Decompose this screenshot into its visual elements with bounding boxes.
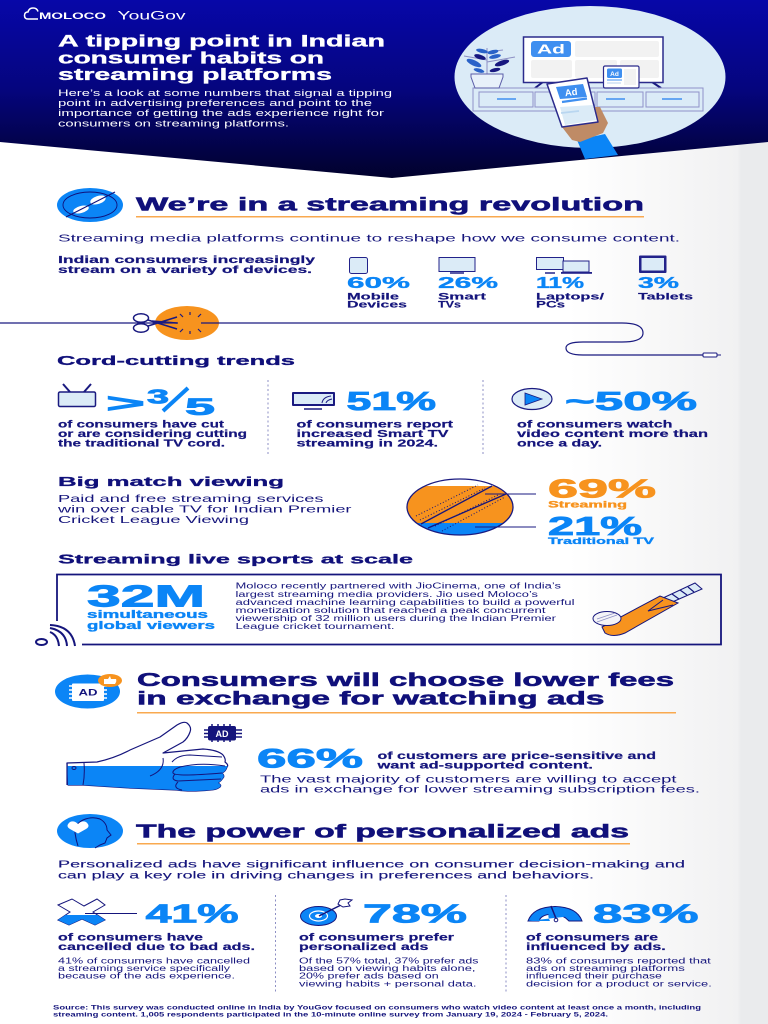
stat: three fifths cutting the cord: or are considering cutting: [58, 429, 247, 440]
intro text: importance of getting the ads experience right for: [58, 108, 385, 119]
partnership text: largest streaming media providers. Jio used Moloco’s: [236, 590, 538, 599]
icon: ad chip: [204, 724, 242, 742]
stat: 78% prefer personalized: Of the 57% total, 37% prefer ads: [299, 956, 479, 965]
stat: 83% influenced: influenced by ads.: [526, 942, 666, 953]
illustration: thumbs up: [67, 722, 242, 791]
explanation text: The vast majority of customers are willing to accept: [260, 774, 677, 785]
stat: 78% prefer personalized: personalized ads: [299, 942, 429, 953]
tv: Ad: [537, 42, 565, 56]
stat: three fifths cutting the cord: 3: [147, 386, 169, 408]
stat: 83% influenced: [526, 898, 712, 988]
hand and phone: [547, 78, 618, 159]
title: [58, 33, 385, 84]
intro text: [58, 858, 685, 882]
devices lead text: Indian consumers increasingly: [58, 255, 316, 266]
source note: streaming content. 1,005 respondents participated in the 10-minute online survey from January 19, 2024 - February 5, 2024.: [53, 1011, 608, 1018]
stat: mobile devices: Devices: [347, 300, 407, 310]
tablet: Ad: [610, 71, 619, 78]
tv: [524, 37, 663, 88]
stat: 41% cancelled: [58, 898, 255, 981]
stat: 66%: 66%: [257, 744, 363, 774]
stat: laptops: PCs: [536, 300, 565, 310]
intro text: point in advertising preferences and point to the: [58, 98, 372, 109]
title: streaming platforms: [58, 66, 332, 84]
icon: play: [512, 388, 552, 410]
stat: three fifths cutting the cord: 5: [185, 394, 215, 421]
icon: cricket bat and ball: [593, 583, 702, 636]
logos: [24, 8, 186, 22]
stat: 83% influenced: 83%: [593, 898, 698, 928]
stat: 41% cancelled: of consumers have: [58, 933, 204, 944]
stat: mobile devices: Mobile: [347, 291, 399, 301]
partnership text: Moloco recently partnered with JioCinema, one of India’s: [236, 582, 561, 591]
section: lower fees: [55, 669, 700, 795]
intro text: Here’s a look at some numbers that signal a tipping: [58, 88, 392, 99]
description: Paid and free streaming services: [58, 494, 324, 505]
stat: 41% cancelled: 41% of consumers have cancelled: [58, 956, 250, 965]
description: [56, 494, 353, 526]
devices lead text: [58, 255, 316, 276]
section: personalized ads: [57, 814, 712, 993]
stat: laptops: 11%: [536, 275, 584, 292]
icon: x mark: [58, 899, 137, 925]
connector plug: [703, 353, 717, 357]
stat: laptops: [536, 258, 605, 310]
stat: smart tvs: [438, 258, 498, 310]
stat: 51% smart tv: of consumers report: [296, 419, 454, 430]
stat: 78% prefer personalized: [299, 898, 479, 988]
partnership text: monetization solution that reached a peak concurrent: [236, 606, 547, 615]
stat: 78% prefer personalized: 20% prefer ads based on: [299, 972, 439, 981]
icon: unplugged cable: [57, 188, 123, 222]
stat: tablets: Tablets: [638, 291, 693, 301]
stat: tablets: 3%: [638, 275, 679, 292]
stat: tablets: [638, 256, 693, 301]
intro text: Personalized ads have significant influence on consumer decision-making and: [58, 858, 685, 870]
icon: target: [300, 899, 352, 926]
scissors: [134, 312, 201, 334]
stat: 83% influenced: decision for a product or service.: [526, 979, 712, 988]
stat: 78% prefer personalized: based on viewing habits alone,: [299, 964, 476, 973]
stat: smart tvs: 26%: [438, 275, 498, 292]
stat: 51% smart tv: increased Smart TV: [296, 429, 449, 440]
stat: mobile devices: 60%: [347, 275, 410, 292]
stat: streaming 69%: 69%: [548, 473, 656, 503]
stat: 78% prefer personalized: of consumers prefer: [299, 933, 454, 944]
icon: ad chip: AD: [216, 729, 229, 739]
title: consumer habits on: [58, 50, 324, 68]
stat: 78% prefer personalized: viewing habits + personal data.: [299, 979, 476, 988]
plant: [464, 48, 515, 88]
stat: 66%: [257, 744, 656, 774]
stat: 41% cancelled: 41%: [146, 898, 239, 928]
section: streaming live sports: [36, 551, 721, 646]
intro text: can play a key role in driving changes in preferences and behaviors.: [58, 870, 594, 882]
heading: cord-cutting trends: Cord-cutting trends: [57, 353, 295, 368]
source note: [53, 1005, 701, 1018]
icon: broadcast signal: [36, 625, 75, 646]
heading: Consumers will choose lower fees: [137, 669, 674, 690]
stat: three fifths cutting the cord: of consumers have cut: [58, 419, 225, 430]
stat: traditional tv 21%: 21%: [548, 511, 642, 541]
heading: We’re in a streaming revolution: [136, 194, 644, 215]
stat: 51% smart tv: [292, 386, 454, 449]
stat: traditional tv 21%: [548, 511, 655, 547]
stat: 41% cancelled: because of the ads experience.: [58, 972, 235, 981]
devices lead text: stream on a variety of devices.: [58, 265, 312, 276]
hand and phone: Ad: [564, 87, 578, 99]
intro text: [58, 88, 392, 130]
partnership text: [236, 582, 575, 631]
tablet: [604, 66, 639, 88]
icon: smart tv: [292, 392, 335, 409]
description: Cricket League Viewing: [58, 515, 250, 526]
stat: 51% smart tv: 51%: [346, 386, 436, 416]
icon: ad chip with thumbs up: AD: [78, 688, 98, 698]
stat: streaming 69%: Streaming: [548, 499, 627, 510]
stat: 32M viewers: simultaneous: [87, 609, 208, 621]
cut cord with scissors: [0, 306, 721, 357]
intro sentence: Streaming media platforms continue to reshape how we consume content.: [58, 234, 680, 245]
stat: laptops: Laptops/: [536, 291, 605, 301]
stat: mobile devices: [347, 258, 410, 310]
section: streaming live sports: Streaming live sports at scale: [58, 551, 413, 566]
source note: Source: This survey was conducted online in India by YouGov focused on consumers who watch video content at least once a month, including: [53, 1005, 701, 1012]
icon: tv: [58, 384, 96, 406]
logos: MOLOCO: [39, 11, 106, 22]
header banner: [0, 0, 768, 178]
stat: 41% cancelled: cancelled due to bad ads.: [58, 942, 255, 953]
section: streaming revolution: [57, 188, 693, 310]
stat: traditional tv 21%: Traditional TV: [548, 536, 655, 547]
explanation text: [260, 774, 700, 795]
panel frame: [57, 574, 721, 644]
stat: 83% influenced: ads on streaming platforms: [526, 964, 685, 973]
intro text: consumers on streaming platforms.: [58, 119, 289, 130]
stat: 83% influenced: of consumers are: [526, 933, 659, 944]
illustration: devices showing ads: [454, 6, 726, 159]
partnership text: League cricket tournament.: [236, 622, 394, 631]
heading: in exchange for watching ads: [137, 687, 604, 708]
stat: 78% prefer personalized: 78%: [363, 898, 467, 928]
stat: 32M viewers: 32M: [87, 579, 205, 614]
explanation text: ads in exchange for lower streaming subscription fees.: [260, 784, 700, 795]
stat: about 50% daily video: [512, 386, 708, 449]
stat: smart tvs: Smart: [438, 291, 486, 301]
icon: gauge: [528, 906, 582, 922]
description: win over cable TV for Indian Premier: [56, 505, 353, 516]
title: A tipping point in Indian: [58, 33, 385, 51]
stat: streaming 69%: [548, 473, 656, 510]
stat: about 50% daily video: of consumers watch: [517, 419, 673, 430]
heading: The power of personalized ads: [136, 821, 629, 842]
stat: three fifths cutting the cord: [58, 384, 247, 449]
stat: 41% cancelled: a streaming service specifically: [58, 964, 230, 973]
stat: about 50% daily video: ~50%: [565, 386, 697, 416]
section: big match viewing: [56, 473, 656, 547]
stat: 66%: want ad-supported content.: [376, 760, 593, 771]
stat: three fifths cutting the cord: >: [106, 388, 145, 418]
stat: 32M viewers: [87, 579, 215, 632]
stat: 83% influenced: influenced their purchase: [526, 972, 662, 981]
stat: 32M viewers: global viewers: [87, 620, 215, 632]
stat: about 50% daily video: video content more than: [517, 429, 708, 440]
section: big match viewing: Big match viewing: [58, 474, 284, 489]
stat: 51% smart tv: streaming in 2024.: [296, 438, 438, 449]
chart: cricket ball: [405, 479, 536, 537]
heading: [137, 669, 676, 714]
stat: about 50% daily video: once a day.: [517, 438, 602, 449]
stat: 66%: of customers are price-sensitive and: [378, 751, 656, 762]
console: [473, 88, 703, 111]
icon: head with heart: [57, 814, 123, 848]
stat: 83% influenced: 83% of consumers reported that: [526, 956, 712, 965]
partnership text: viewership of 32 million users during the Indian Premier: [236, 614, 557, 623]
stat: smart tvs: TVs: [438, 300, 461, 310]
stat: three fifths cutting the cord: the traditional TV cord.: [58, 438, 225, 449]
logos: YouGov: [118, 10, 186, 22]
icon: ad chip with thumbs up: [55, 674, 122, 708]
partnership text: advanced machine learning capabilities to build a powerful: [236, 598, 575, 607]
